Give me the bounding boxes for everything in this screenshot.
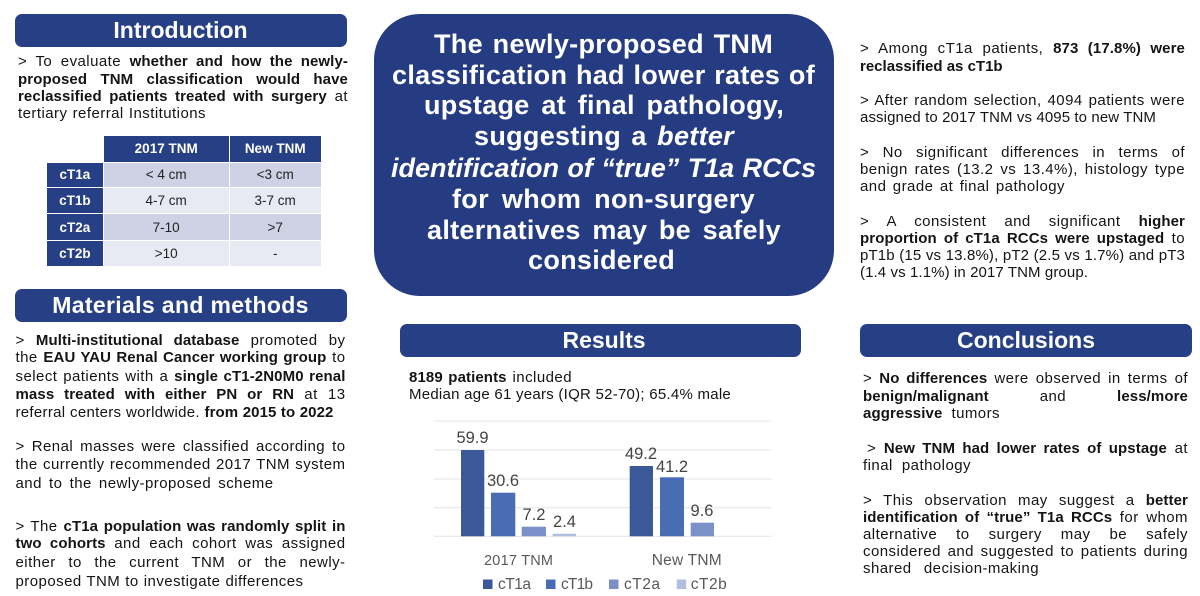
panel: main message title: considered <box>528 245 675 275</box>
heading: Introduction <box>14 14 346 47</box>
text block: materials and methods: either to the current TNM or the newly- <box>16 554 346 571</box>
text block: introduction aim <box>18 53 348 122</box>
text block: key results: > Among cT1a patients, 873 (17.8%) were <box>860 40 1185 57</box>
text block: introduction aim: reclassified patients treated with surgery at <box>18 88 348 105</box>
data labels: 2.4 <box>553 513 576 531</box>
table: TNM size criteria: 4-7 cm <box>146 193 187 208</box>
table: TNM size criteria: - <box>273 246 277 261</box>
text block: patient summary: 8189 patients included <box>409 369 572 386</box>
text block: key results: benign rates (13.2 vs 13.4%), histology type <box>860 161 1185 178</box>
text block: conclusions: final pathology <box>863 457 971 474</box>
table: TNM size criteria: 7-10 <box>153 220 180 235</box>
panel: main message title: alternatives may be safely <box>427 215 781 245</box>
table: TNM size criteria: < 4 cm <box>146 167 187 182</box>
table: TNM size criteria: cT2b <box>59 246 91 261</box>
axis labels <box>484 552 722 569</box>
panel: main message title: upstage at final pathology, <box>424 90 784 120</box>
legend <box>483 576 727 593</box>
table: TNM size criteria: cT1a <box>59 167 90 182</box>
text block: key results: pT1b (15 vs 13.8%), pT2 (2.5 vs 1.7%) and pT3 <box>860 247 1185 264</box>
text block: materials and methods: referral centers worldwide. from 2015 to 2022 <box>16 404 334 421</box>
heading: Conclusions: Conclusions <box>957 327 1095 353</box>
table: TNM size criteria: cT2a <box>59 220 90 235</box>
panel: main message title: classification had lower rates of <box>392 60 815 90</box>
text block: key results: assigned to 2017 TNM vs 4095 to new TNM <box>860 109 1156 126</box>
text block: key results: (1.4 vs 1.1%) in 2017 TNM group. <box>860 264 1088 281</box>
text block: conclusions: benign/malignant and less/more <box>863 388 1188 405</box>
text block: materials and methods: select patients with a single cT1-2N0M0 renal <box>16 368 346 385</box>
text block: materials and methods: > Renal masses were classified according to <box>16 438 346 455</box>
bars: 2017 TNM <box>461 450 576 536</box>
heading: Conclusions <box>860 324 1192 356</box>
legend: cT1a <box>498 576 531 593</box>
table: TNM size criteria: cT1b <box>59 193 91 208</box>
panel: main message title: identification of “true” T1a RCCs <box>391 153 816 183</box>
bars: New TNM <box>630 466 714 536</box>
text block: introduction aim: proposed TNM classification would have <box>18 70 348 88</box>
data labels: 30.6 <box>487 472 519 490</box>
panel: main message title: The newly-proposed TNM <box>434 28 773 58</box>
text block: key results <box>860 40 1185 281</box>
text block: conclusions <box>863 370 1188 577</box>
text block: materials and methods: > The cT1a population was randomly split in <box>16 518 346 535</box>
data labels: 49.2 <box>625 445 657 463</box>
table: TNM size criteria: 2017 TNM <box>135 141 198 156</box>
text block: key results: > A consistent and significant higher <box>860 213 1185 230</box>
text block: patient summary: Median age 61 years (IQR 52-70); 65.4% male <box>409 386 731 403</box>
legend: cT1b <box>561 576 593 593</box>
legend: cT2a <box>624 576 660 593</box>
heading: Results: Results <box>562 327 646 353</box>
bar chart: pathology stage by TNM <box>434 420 772 593</box>
text block: materials and methods: the EAU YAU Renal Cancer working group to <box>16 349 346 366</box>
text block: materials and methods: the currently recommended 2017 TNM system <box>16 456 346 473</box>
legend: cT2b <box>691 576 727 593</box>
text block: conclusions: considered and suggested to patients during <box>863 543 1188 560</box>
text block: conclusions: > New TNM had lower rates of upstage at <box>867 440 1188 457</box>
heading: Materials and methods: Materials and methods <box>52 292 309 318</box>
text block: key results: reclassified as cT1b <box>860 58 1003 75</box>
table: TNM size criteria <box>47 136 321 266</box>
text block: key results: and grade at final pathology <box>860 178 1065 195</box>
heading: Materials and methods <box>14 288 346 322</box>
text block: conclusions: shared decision-making <box>863 560 1039 577</box>
text block: conclusions: > No differences were observed in terms of <box>863 370 1188 387</box>
text block: conclusions: > This observation may suggest a better <box>863 492 1188 509</box>
data labels: 59.9 <box>456 429 489 447</box>
table: TNM size criteria: <3 cm <box>257 167 294 182</box>
panel: main message title <box>374 14 834 296</box>
axis labels: 2017 TNM <box>484 553 553 569</box>
axis labels: New TNM <box>652 552 722 569</box>
table: TNM size criteria: >7 <box>267 220 283 235</box>
text block: conclusions: identification of “true” T1a RCCs for whom <box>863 509 1188 526</box>
table: TNM size criteria: >10 <box>155 246 178 261</box>
panel: main message title: for whom non-surgery <box>452 184 755 214</box>
text block: conclusions: alternative to surgery may be safely <box>863 526 1188 543</box>
text block: materials and methods: > Multi-institutional database promoted by <box>16 332 346 349</box>
text block: materials and methods <box>16 332 346 590</box>
text block: materials and methods: proposed TNM to investigate differences <box>16 573 304 590</box>
panel: main message title: suggesting a better <box>474 121 734 151</box>
data labels <box>456 429 713 531</box>
text block: key results: > After random selection, 4094 patients were <box>860 92 1185 109</box>
data labels: 7.2 <box>523 506 545 524</box>
text block: materials and methods: and to the newly-proposed scheme <box>16 475 274 492</box>
text block: key results: proportion of cT1a RCCs were upstaged to <box>860 230 1185 247</box>
heading: Results <box>400 324 801 356</box>
heading: Introduction: Introduction <box>113 16 248 42</box>
text block: introduction aim: tertiary referral Institutions <box>18 105 206 122</box>
text block: introduction aim: > To evaluate whether and how the newly- <box>18 53 348 70</box>
data labels: 9.6 <box>691 502 713 520</box>
text block: key results: > No significant differences in terms of <box>860 144 1185 161</box>
text block: materials and methods: mass treated with either PN or RN at 13 <box>16 386 346 403</box>
table: TNM size criteria: 3-7 cm <box>255 193 296 208</box>
data labels: 41.2 <box>656 458 688 476</box>
text block: patient summary <box>409 369 731 403</box>
text block: conclusions: aggressive tumors <box>863 405 1000 422</box>
text block: materials and methods: two cohorts and each cohort was assigned <box>16 535 346 552</box>
table: TNM size criteria: New TNM <box>245 141 306 156</box>
